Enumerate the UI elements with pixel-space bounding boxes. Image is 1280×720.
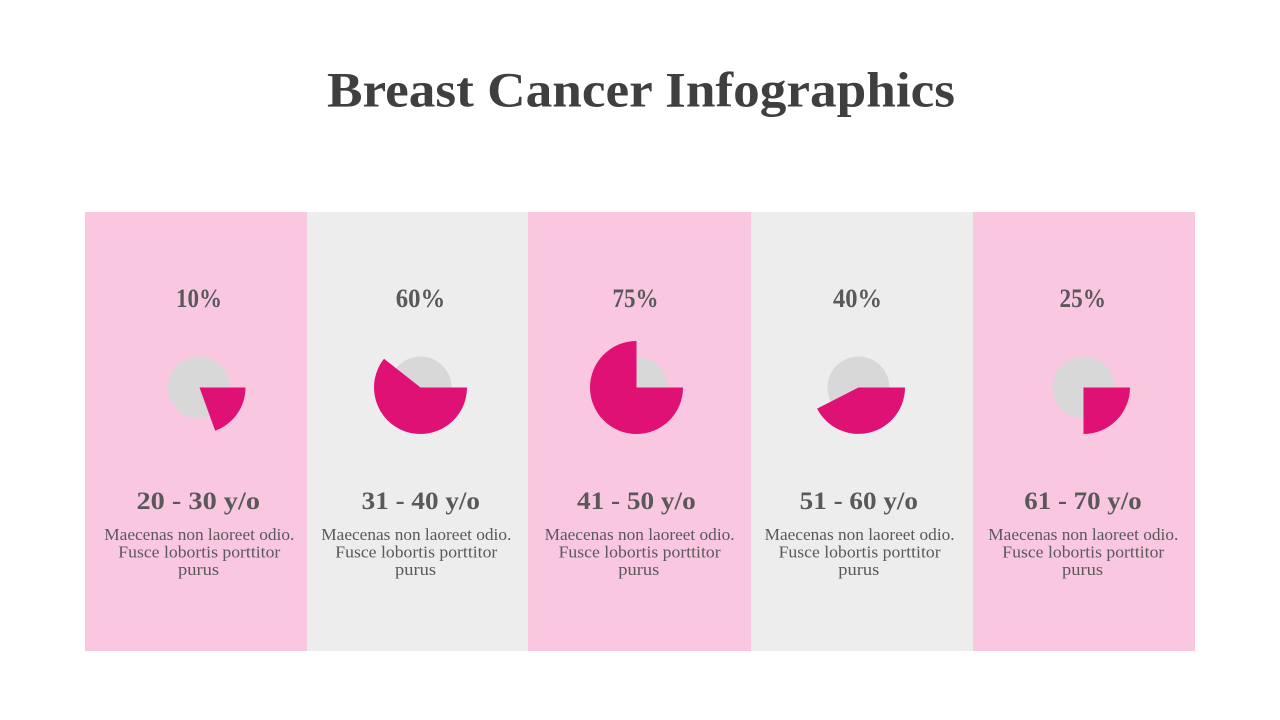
- panel background: [528, 212, 751, 651]
- age range heading: 20 - 30 y/o: [136, 488, 260, 515]
- description: Fusce lobortis porttitor: [779, 542, 941, 561]
- panel: 41-50 y/o: [528, 212, 751, 651]
- description: purus: [395, 560, 436, 579]
- panel: 51-60 y/o: [751, 212, 973, 651]
- percentage: 25%: 25%: [1060, 283, 1106, 313]
- description: purus: [178, 560, 219, 579]
- description: purus: [1062, 560, 1103, 579]
- description: Fusce lobortis porttitor: [559, 542, 721, 561]
- pie chart: 75%: [590, 341, 683, 434]
- description: Fusce lobortis porttitor: [118, 542, 281, 561]
- pie chart: 40%: [817, 356, 905, 434]
- panel: 61-70 y/o: [973, 212, 1195, 651]
- panel background: [973, 212, 1195, 651]
- percentage: 60%: 60%: [396, 283, 445, 313]
- description: [988, 525, 1178, 579]
- title: Breast Cancer Infographics: [327, 62, 955, 118]
- age range heading: 41 - 50 y/o: [577, 488, 696, 515]
- age range heading: 61 - 70 y/o: [1024, 488, 1142, 515]
- description: Maecenas non laoreet odio.: [988, 525, 1178, 544]
- pie chart: 10%: [168, 356, 246, 431]
- description: Maecenas non laoreet odio.: [104, 525, 294, 544]
- description: Maecenas non laoreet odio.: [545, 525, 735, 544]
- panel background: [751, 212, 973, 651]
- panel: 20-30 y/o: [85, 212, 307, 651]
- percentage: 75%: 75%: [612, 283, 658, 313]
- description: purus: [618, 560, 659, 579]
- panel background: [85, 212, 307, 651]
- pie chart: 60%: [374, 356, 467, 434]
- panel background: [307, 212, 528, 651]
- description: Maecenas non laoreet odio.: [765, 525, 955, 544]
- percentage: 10%: 10%: [176, 283, 222, 313]
- pie chart: 25%: [1052, 356, 1130, 434]
- description: [765, 525, 955, 579]
- description: [104, 525, 294, 579]
- description: [321, 525, 511, 579]
- percentage: 40%: 40%: [833, 283, 882, 313]
- description: purus: [838, 560, 879, 579]
- description: Maecenas non laoreet odio.: [321, 525, 511, 544]
- description: Fusce lobortis porttitor: [1002, 542, 1165, 561]
- age range heading: 51 - 60 y/o: [800, 488, 918, 515]
- age range heading: 31 - 40 y/o: [362, 488, 480, 515]
- description: Fusce lobortis porttitor: [335, 542, 498, 561]
- description: [545, 525, 735, 579]
- panel: 31-40 y/o: [307, 212, 528, 651]
